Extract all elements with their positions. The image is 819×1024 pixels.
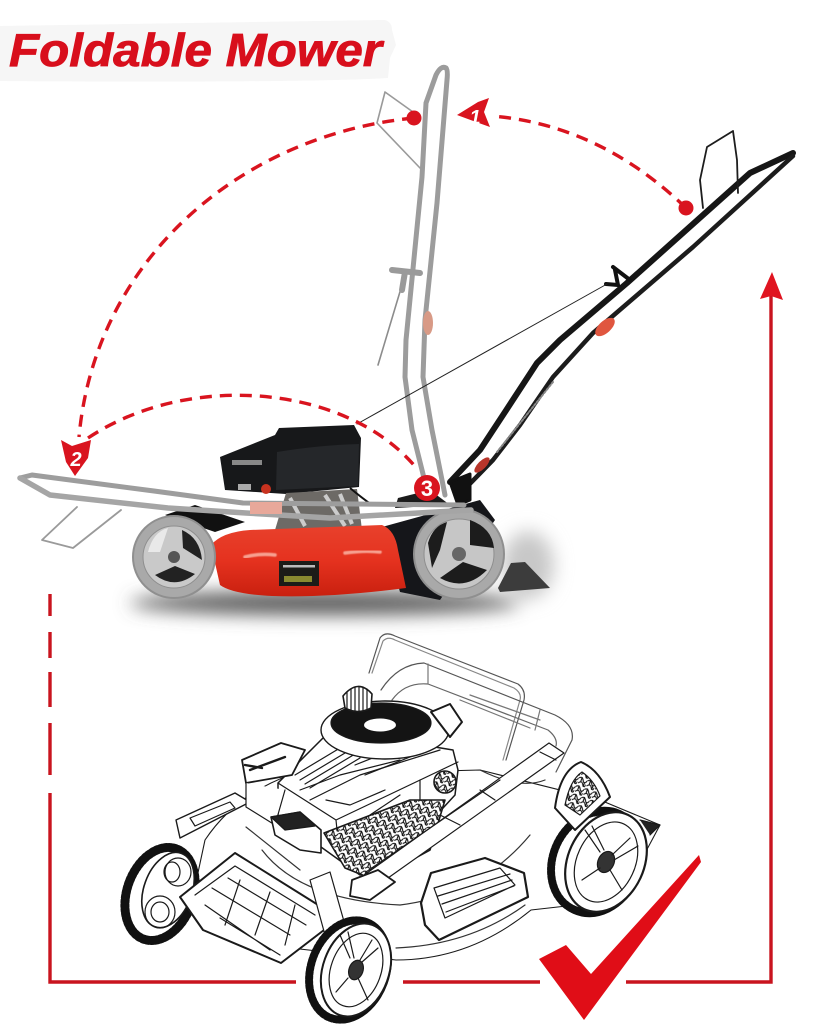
lowered bail wire — [700, 131, 738, 208]
raised handle control lever — [378, 285, 402, 365]
mower shadow — [130, 531, 554, 615]
flat bail wire — [42, 507, 121, 548]
folded thin frame — [369, 634, 524, 760]
title banner — [0, 20, 396, 82]
raised bail wire — [377, 92, 420, 168]
deck label plate — [279, 561, 319, 586]
lowered handle tube — [353, 743, 564, 883]
folded grey handle, flat position — [20, 475, 471, 548]
control lever — [606, 267, 630, 285]
right wheel — [414, 509, 504, 599]
throttle cable — [357, 284, 607, 424]
fuel tank — [242, 743, 305, 783]
arc from raised to flat — [79, 118, 414, 437]
line drawing of folded mower — [110, 634, 662, 1024]
title: Foldable Mower — [9, 24, 385, 76]
handle bracket — [310, 872, 345, 935]
step marker 1 — [457, 98, 490, 129]
rear hatch — [421, 858, 528, 940]
fuel cap — [343, 686, 372, 712]
chassis and black rear housing — [165, 490, 550, 600]
step marker 1: 1 — [469, 107, 481, 129]
engine internals, scribbled — [324, 800, 445, 880]
fold arcs — [79, 116, 686, 470]
arrowhead up — [760, 272, 783, 300]
step marker 2: 2 — [69, 449, 82, 471]
exhaust cap — [431, 704, 462, 737]
red deck — [211, 525, 406, 596]
step marker 2 — [61, 440, 91, 476]
rear right bracket — [555, 762, 610, 830]
red check mark — [539, 855, 701, 1020]
raised handle position, grey — [377, 67, 447, 495]
arc from flat to folded — [88, 395, 418, 470]
black air filter — [331, 703, 431, 743]
recoil block — [271, 812, 321, 853]
folded tube handle — [381, 663, 572, 772]
arc from lowered to raised — [492, 116, 686, 208]
discharge flap — [498, 562, 550, 592]
engine — [220, 425, 372, 530]
step marker 3 — [414, 475, 440, 501]
left wheel — [133, 516, 215, 598]
start dots — [406, 110, 694, 216]
mower deck — [190, 770, 660, 960]
red frame with arrow — [50, 272, 783, 982]
air filter housing — [321, 701, 449, 759]
front bumper — [180, 853, 331, 963]
front wheel — [293, 906, 405, 1024]
right wheel — [533, 792, 662, 932]
black handle, lowered position — [357, 131, 793, 505]
engine body — [278, 730, 458, 875]
step marker 3: 3 — [421, 476, 433, 501]
deck rear handle bar — [176, 793, 250, 838]
left wheel — [110, 835, 210, 953]
